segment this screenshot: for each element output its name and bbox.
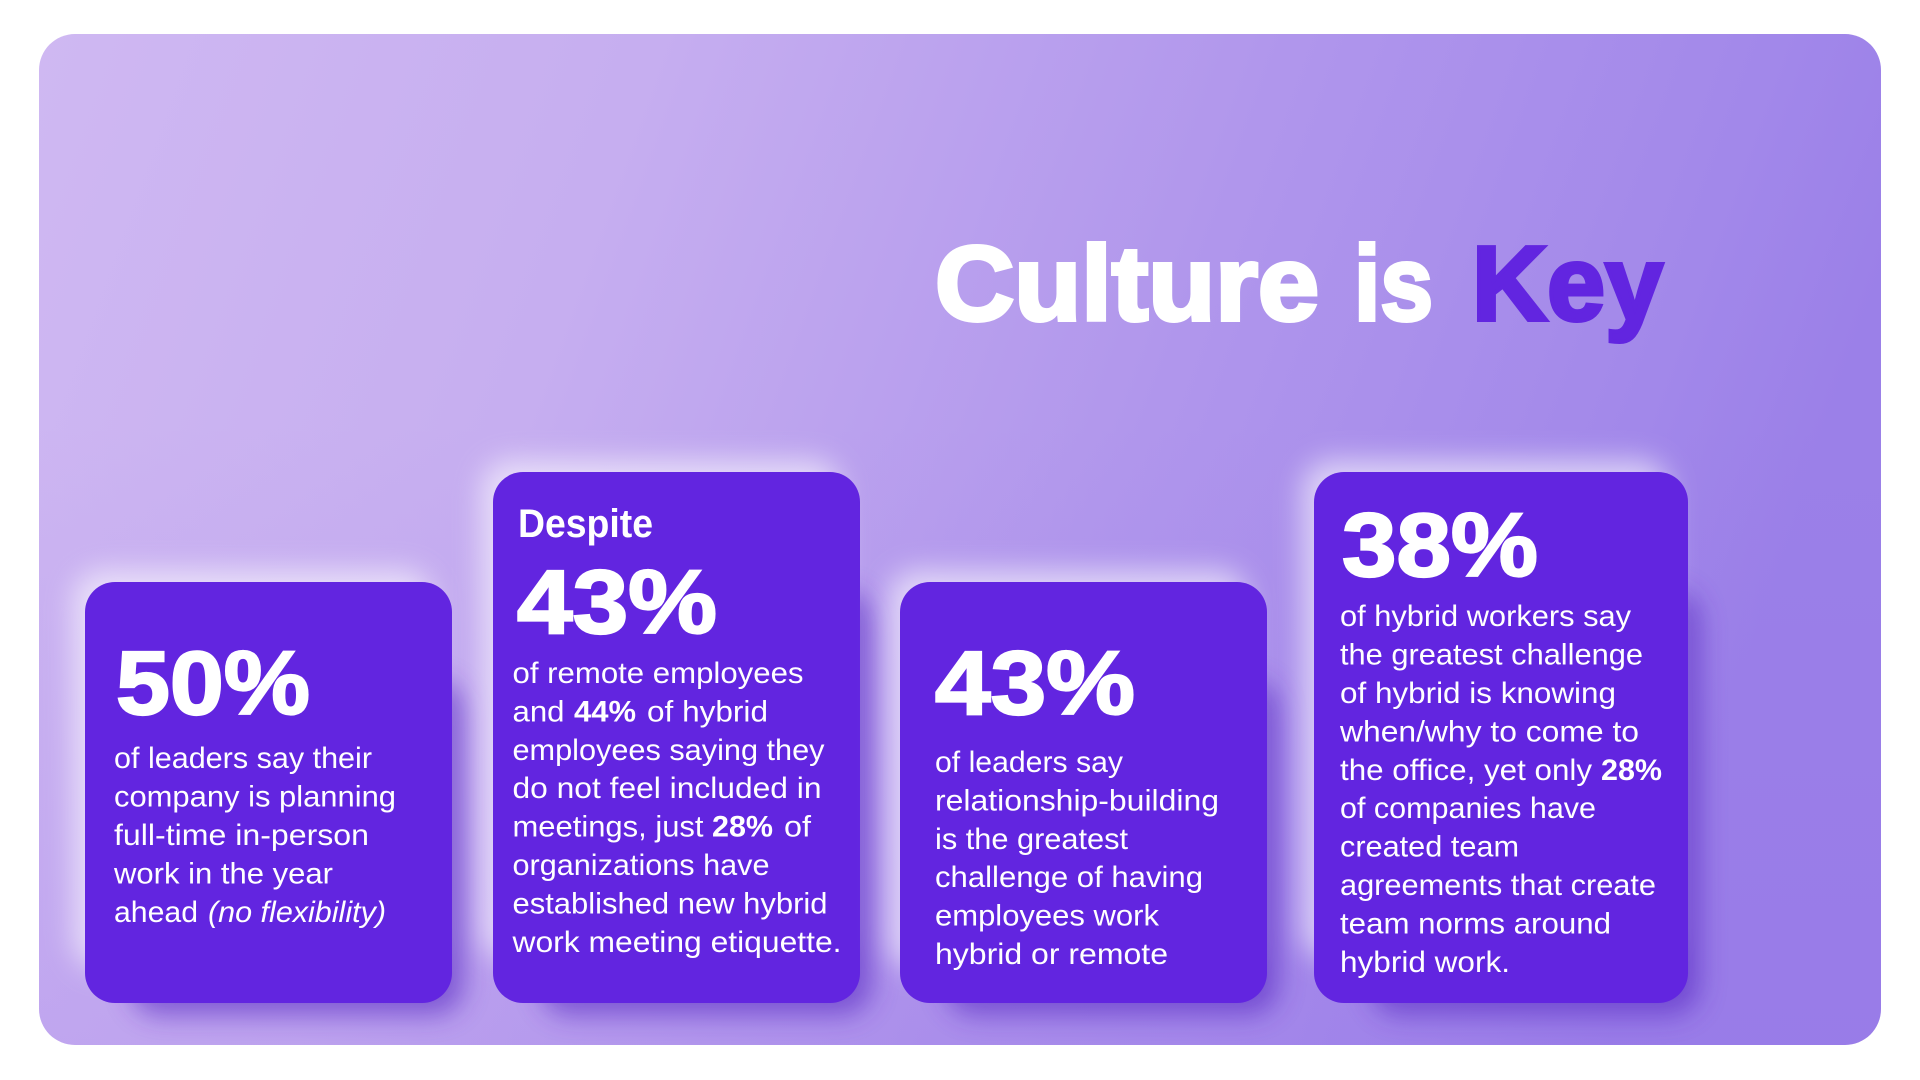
- text block: despite description: do not feel included in: [512, 772, 822, 805]
- text block: despite description: and: [512, 695, 564, 728]
- text block: 38% description: team norms around: [1340, 908, 1611, 940]
- text block: 38% description: the greatest challenge: [1340, 638, 1643, 671]
- text block: 38% description: 28%: [1601, 754, 1662, 787]
- text block: despite description: of hybrid: [647, 695, 768, 728]
- text block: 43% description: employees work: [935, 900, 1160, 933]
- text block: 50% description: ahead: [114, 896, 198, 929]
- text block: 38% description: hybrid work.: [1340, 946, 1510, 979]
- text block: despite description: of: [784, 811, 812, 844]
- text block: despite description: of remote employees: [512, 657, 804, 690]
- text block: 38% description: [1339, 600, 1662, 979]
- text block: 38% description: of companies have: [1340, 792, 1596, 825]
- text block: 43% description: relationship-building: [935, 784, 1219, 817]
- text block: 38% description: when/why to come to: [1339, 715, 1639, 748]
- text block: 43% description: [935, 746, 1219, 971]
- text block: despite description: 28%: [712, 811, 773, 844]
- text block: 50% description: of leaders say their: [114, 742, 372, 775]
- text block: despite description: 44%: [574, 695, 636, 728]
- title: Culture: [935, 225, 1319, 343]
- text block: 43% description: challenge of having: [935, 861, 1203, 894]
- text block: 43% description: hybrid or remote: [935, 938, 1168, 971]
- text block: 43% description: is the greatest: [935, 823, 1129, 856]
- text block: 50% description: [113, 742, 396, 929]
- text block: 50% description: company is planning: [114, 780, 396, 814]
- text block: 38% description: agreements that create: [1340, 869, 1656, 902]
- text block: 50% description: full-time in-person: [114, 819, 369, 852]
- text block: 43% description: of leaders say: [935, 746, 1123, 779]
- title: Key: [1472, 225, 1663, 343]
- text block: 50% description: (no flexibility): [208, 896, 386, 929]
- text block: 38% description: created team: [1340, 831, 1519, 864]
- panel: card 43%: [888, 570, 1279, 1015]
- text: Despite: Despite: [518, 502, 653, 546]
- stat: 38%: 38%: [1342, 496, 1538, 596]
- text block: 50% description: work in the year: [113, 858, 333, 890]
- text block: despite description: organizations have: [512, 849, 770, 882]
- text block: 38% description: of hybrid workers say: [1340, 600, 1631, 633]
- title: [935, 225, 1663, 343]
- text block: despite description: work meeting etiquette.: [511, 926, 842, 959]
- text block: despite description: meetings, just: [512, 811, 704, 844]
- panel: card despite 43%: [481, 460, 872, 1015]
- text block: 38% description: of hybrid is knowing: [1340, 677, 1616, 710]
- panel: card 38%: [1302, 460, 1700, 1015]
- title: is: [1354, 225, 1433, 343]
- text block: 38% description: the office, yet only: [1340, 754, 1592, 787]
- text block: despite description: established new hybrid: [512, 887, 828, 920]
- stat: 43%: 43%: [935, 634, 1135, 734]
- stat: 50%: 50%: [116, 634, 310, 734]
- text block: despite description: [511, 657, 842, 959]
- panel: card 50%: [73, 570, 464, 1015]
- text block: despite description: employees saying they: [512, 734, 824, 767]
- stat: 43%: 43%: [517, 553, 717, 653]
